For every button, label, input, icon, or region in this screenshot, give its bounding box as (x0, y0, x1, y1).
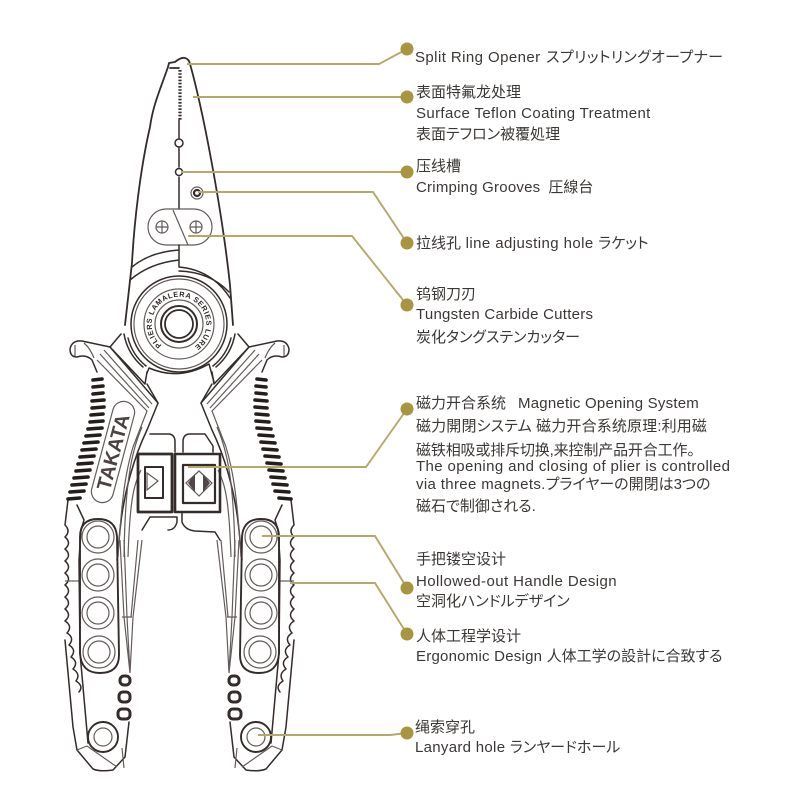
callout: ergonomic design: 人体工程学设计 (416, 628, 521, 645)
pliers illustration (64, 56, 295, 772)
line adjusting hole rivet (191, 187, 203, 199)
callout: surface teflon coating: Surface Teflon Coating Treatment (416, 105, 651, 122)
callout: magnetic opening system: 磁力開閉システム 磁力开合系统原理:利用磁 (416, 418, 707, 435)
disc text: PLIERS LAMALERA SERIES LURE (146, 292, 212, 350)
callout: crimping grooves: Crimping Grooves 圧線台 (416, 179, 593, 196)
callout: tungsten carbide cutters: 钨钢刀刃 (416, 286, 476, 303)
jaw outline (125, 58, 233, 325)
callout: tungsten carbide cutters: 炭化タングステンカッター (416, 329, 580, 346)
callout: hollowed-out handle: 空洞化ハンドルデザイン (416, 592, 570, 610)
callout: magnetic opening system (188, 395, 730, 515)
callout: surface teflon coating (193, 84, 651, 143)
callout: split ring opener (187, 42, 723, 66)
pivot disc (130, 275, 228, 373)
right magnet box (175, 454, 220, 512)
left magnet box (138, 454, 172, 512)
callout: surface teflon coating: 表面テフロン被覆処理 (416, 126, 560, 143)
callout: tungsten carbide cutters (188, 236, 593, 346)
callout: hollowed-out handle (262, 536, 617, 610)
serrated cutting edge (178, 70, 182, 120)
callout: ergonomic design (290, 583, 723, 665)
screw plate (148, 209, 212, 245)
callout: lanyard hole (258, 719, 620, 756)
callout: crimping grooves: 压线槽 (416, 158, 461, 175)
upper lugs (150, 434, 213, 452)
callout: tungsten carbide cutters: Tungsten Carbide Cutters (416, 306, 593, 323)
center lower arc (147, 364, 214, 382)
callout: lanyard hole: 绳索穿孔 (415, 719, 475, 736)
callout: hollowed-out handle: Hollowed-out Handle Design (416, 573, 617, 590)
callout: hollowed-out handle: 手把镂空设计 (416, 551, 506, 568)
callout: magnetic opening system: The opening and closing of plier is controlled (416, 458, 730, 475)
callout: line adjusting hole: 拉线孔 line adjusting hole ラケット (416, 235, 649, 252)
callout: split ring opener: Split Ring Opener スプリットリングオープナー (415, 49, 723, 66)
callout: magnetic opening system: 磁铁相吸或排斥切换,来控制产品开合工作。 (416, 442, 695, 459)
callout: surface teflon coating: 表面特氟龙处理 (416, 84, 521, 101)
TAKATA badge (89, 399, 138, 505)
crimping holes (175, 139, 183, 176)
lower lugs (142, 513, 220, 540)
callout: magnetic opening system: via three magnets.プライヤーの開閉は3つの (416, 476, 711, 493)
callout: ergonomic design: Ergonomic Design 人体工学の設計に合致する (416, 648, 723, 665)
callout: crimping grooves (181, 158, 593, 196)
callout: magnetic opening system: 磁力开合系统 Magnetic Opening System (416, 395, 699, 412)
pivot arcs (130, 245, 230, 298)
left handle (65, 334, 158, 771)
right handle (201, 334, 294, 771)
TAKATA badge: TAKATA (93, 412, 135, 493)
callout: magnetic opening system: 磁石で制御される. (416, 498, 536, 515)
callout: lanyard hole: Lanyard hole ランヤードホール (415, 739, 620, 756)
callout: line adjusting hole (198, 192, 649, 252)
